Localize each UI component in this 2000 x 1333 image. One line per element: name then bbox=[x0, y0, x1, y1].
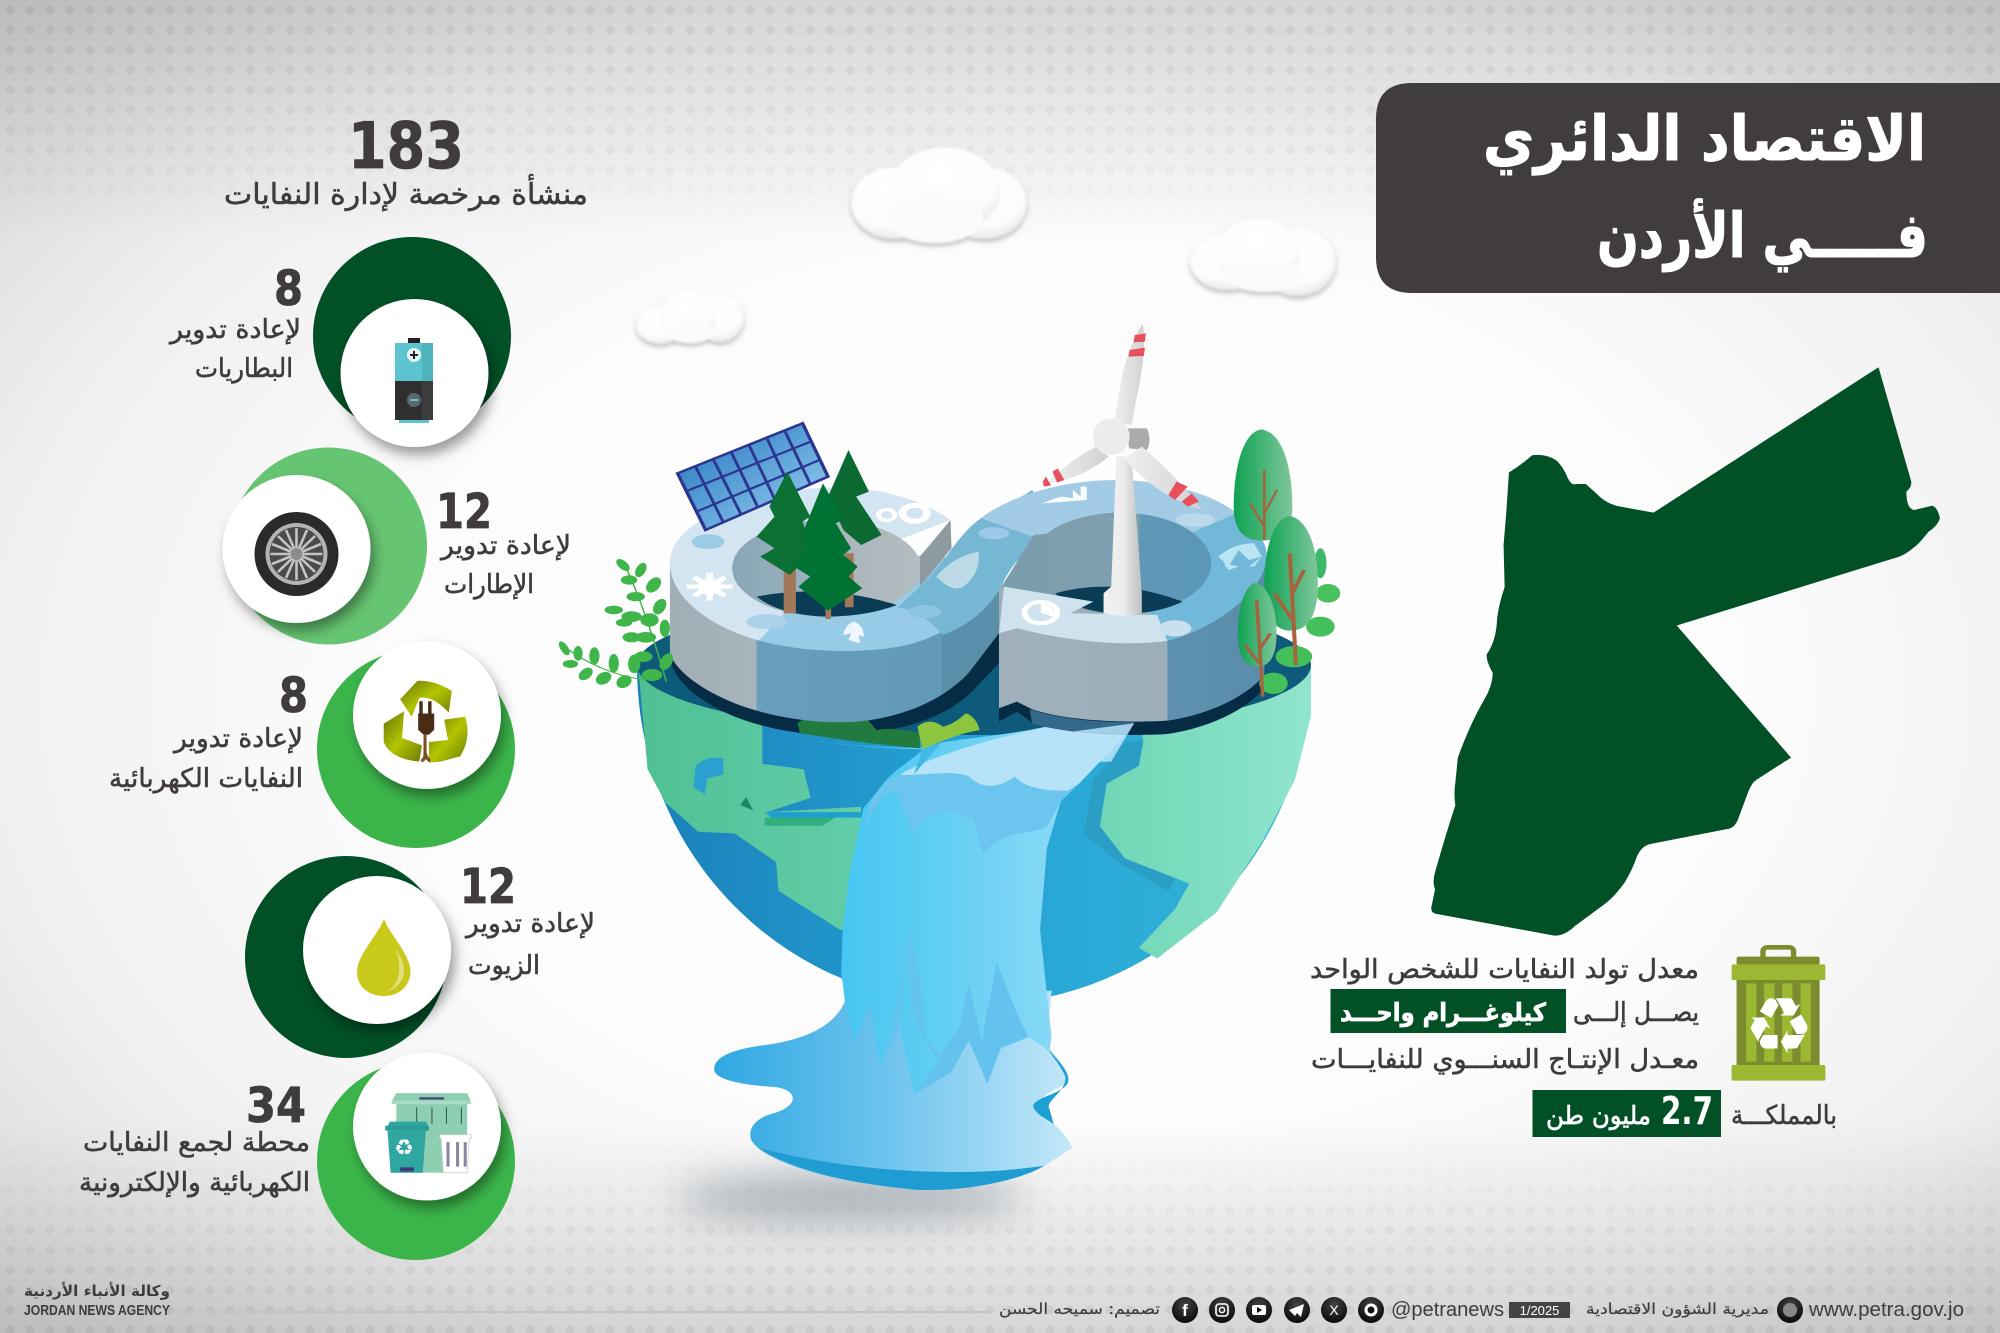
label: لإعادة تدوير bbox=[172, 724, 303, 754]
text line 3: معـدل الإنتـاج السنـــوي للنفايـــات bbox=[1311, 1045, 1699, 1075]
headline stat: 183: 183 bbox=[348, 110, 464, 184]
wind turbine bbox=[1043, 323, 1202, 616]
infinity loop and scene bbox=[557, 323, 1340, 763]
icon: solar panel bbox=[678, 423, 828, 530]
website: www.petra.gov.jo bbox=[1808, 1299, 1964, 1321]
item: collection stations bbox=[79, 1052, 515, 1260]
label: الإطارات bbox=[444, 570, 534, 600]
icon: recycled plug bbox=[384, 681, 468, 762]
label bbox=[464, 909, 595, 981]
agency logo text bbox=[24, 1282, 170, 1319]
leafy branches bbox=[557, 558, 676, 689]
text line 1: معدل تولد النفايات للشخص الواحد bbox=[1310, 955, 1699, 985]
label bbox=[168, 315, 301, 384]
footer bbox=[24, 1282, 1964, 1323]
icon: recycling bin: ♻ bbox=[1744, 982, 1814, 1072]
bushes bbox=[797, 713, 980, 749]
loop top surface bbox=[670, 480, 1267, 651]
number: 34 bbox=[246, 1078, 306, 1134]
cloud large bbox=[851, 147, 1027, 243]
central illustration: earth and infinity loop bbox=[557, 323, 1340, 1190]
label: الزيوت bbox=[468, 951, 540, 981]
headline stat: 183: منشأة مرخصة لإدارة النفايات bbox=[224, 173, 588, 212]
label: لإعادة تدوير bbox=[464, 909, 595, 939]
department: مديرية الشؤون الاقتصادية bbox=[1586, 1300, 1769, 1318]
social icons bbox=[1172, 1297, 1384, 1323]
number: 12 bbox=[460, 859, 516, 915]
item: batteries bbox=[168, 237, 511, 447]
land masses bbox=[637, 659, 1311, 959]
ground shadow bbox=[675, 1176, 1025, 1220]
agency logo text: وكالة الأنباء الأردنية bbox=[24, 1282, 170, 1300]
number: 8 bbox=[279, 668, 308, 724]
label: الكهربائية والإلكترونية bbox=[79, 1168, 310, 1198]
agency logo text: JORDAN NEWS AGENCY bbox=[24, 1303, 170, 1319]
issue tag: 1/2025 bbox=[1520, 1303, 1559, 1318]
label bbox=[109, 724, 303, 794]
label bbox=[79, 1128, 310, 1198]
map of Jordan bbox=[1431, 367, 1940, 936]
surface icons bbox=[687, 487, 1262, 643]
label: محطة لجمع النفايات bbox=[83, 1128, 310, 1158]
loop inner holes bbox=[732, 513, 1211, 617]
light water band bbox=[1030, 723, 1134, 763]
icon: bins bbox=[385, 1093, 472, 1173]
designer credit: تصميم: سميحه الحسن bbox=[999, 1300, 1160, 1318]
plate bbox=[637, 595, 1311, 735]
label bbox=[439, 531, 571, 600]
number: 8 bbox=[274, 261, 303, 317]
highlight: one kilogram bbox=[1330, 989, 1566, 1033]
highlight: 2.7 million tons bbox=[1532, 1089, 1721, 1137]
icon: tire bbox=[254, 512, 338, 596]
title line 1: الاقتصاد الدائري bbox=[1483, 102, 1926, 175]
icon: battery bbox=[395, 338, 433, 423]
highlight: 2.7 million tons: مليون طن bbox=[1546, 1101, 1651, 1130]
social icons: f bbox=[1182, 1301, 1188, 1320]
waste statistics bbox=[1310, 947, 1837, 1137]
deciduous trees and leaves bbox=[1234, 429, 1340, 697]
label: البطاريات bbox=[195, 354, 293, 384]
text line 2: يصـــل إلـــى bbox=[1573, 998, 1699, 1028]
label: لإعادة تدوير bbox=[439, 531, 571, 561]
number: 12 bbox=[436, 484, 492, 540]
globe bbox=[637, 595, 1311, 1005]
item: collection stations: ♻ bbox=[394, 1136, 414, 1161]
social icons: X bbox=[1329, 1302, 1339, 1318]
issue tag bbox=[1509, 1302, 1570, 1318]
handle: @petranews bbox=[1391, 1299, 1504, 1321]
icon: globe bbox=[1777, 1297, 1803, 1323]
label: النفايات الكهربائية bbox=[109, 764, 303, 794]
highlight: 2.7 million tons: 2.7 bbox=[1661, 1089, 1713, 1133]
cloud right bbox=[1190, 218, 1336, 296]
puzzle accents bbox=[692, 513, 1215, 636]
item: oils bbox=[245, 856, 595, 1058]
headline stat: 183 bbox=[224, 110, 588, 212]
label: لإعادة تدوير bbox=[168, 315, 301, 345]
item: e-waste bbox=[109, 641, 515, 848]
text line 4: بالمملكـــة bbox=[1731, 1101, 1837, 1131]
icon: recycling bin bbox=[1732, 947, 1825, 1081]
loop walls bbox=[670, 553, 1267, 722]
title panel bbox=[1376, 83, 2000, 293]
highlight: one kilogram: كيلوغـــرام واحـــد bbox=[1340, 998, 1546, 1028]
shadow under loop bbox=[670, 633, 1264, 736]
arrow head bbox=[999, 587, 1167, 643]
cloud small bbox=[636, 290, 744, 344]
item: tires bbox=[222, 448, 571, 644]
clouds bbox=[636, 147, 1336, 344]
waterfall bbox=[714, 726, 1125, 1190]
icon: oil drop bbox=[357, 919, 411, 996]
pine trees bbox=[757, 450, 882, 619]
